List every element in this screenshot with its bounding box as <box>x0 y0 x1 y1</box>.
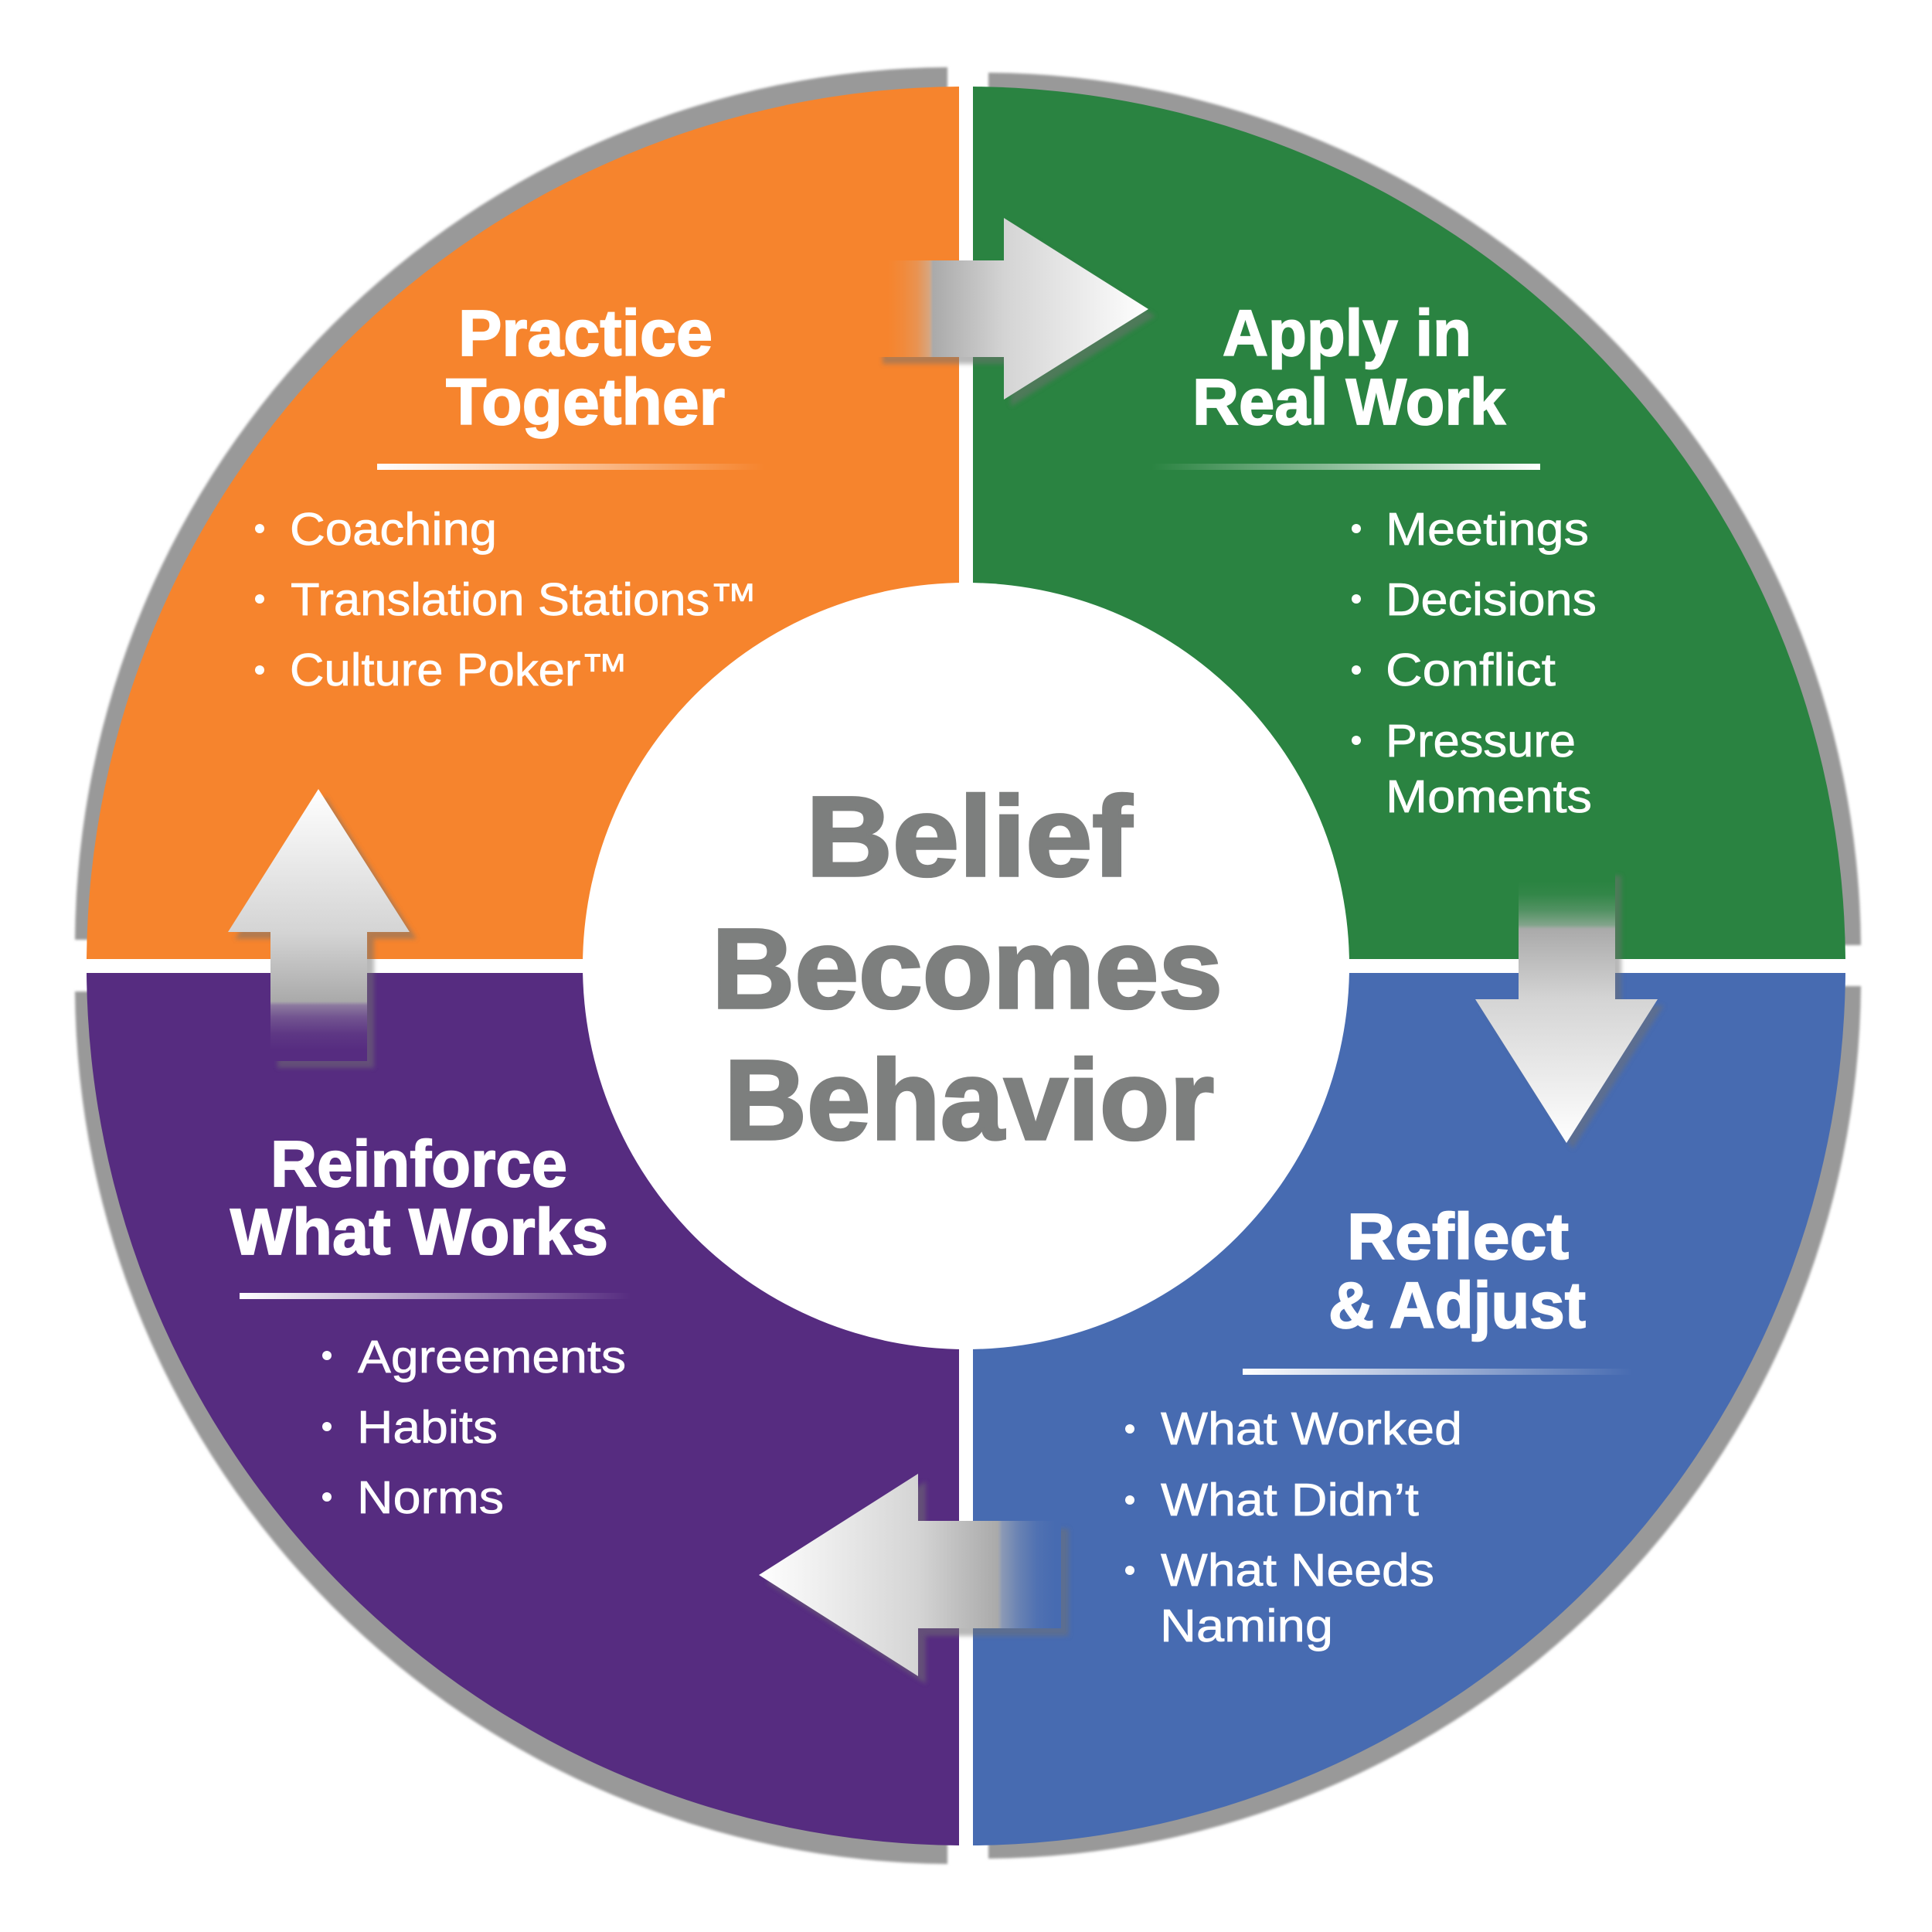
heading: apply in real work: Real Work <box>1192 366 1505 438</box>
list item: decisions: Decisions <box>1386 574 1597 625</box>
panel: reflect and adjust <box>973 973 1861 1859</box>
list item: conflict: Conflict <box>1386 645 1556 696</box>
quadrant: blue <box>973 973 1845 1845</box>
list item: pressure moments: Moments <box>1386 771 1592 822</box>
heading: practice together: Together <box>446 366 725 438</box>
quadrant: purple <box>87 973 959 1845</box>
heading: apply in real work: Apply in <box>1223 297 1471 369</box>
list item: pressure moments: Pressure <box>1386 716 1576 767</box>
list item: habits: Habits <box>357 1402 498 1453</box>
center title: Becomes <box>712 906 1223 1032</box>
heading rule <box>240 1293 631 1299</box>
list item: coaching: Coaching <box>290 504 497 555</box>
list item: what needs naming: Naming <box>1160 1600 1333 1651</box>
heading: apply in real work <box>1192 297 1505 438</box>
panel: reinforce what works <box>75 973 959 1864</box>
quadrant: green <box>973 87 1845 959</box>
panel shadow: purple <box>75 992 947 1864</box>
panel: practice together <box>75 67 959 959</box>
heading: reinforce what works <box>230 1128 608 1268</box>
list item: what didn't: What Didn’t <box>1161 1475 1419 1526</box>
list: reflect items <box>1125 1403 1462 1651</box>
heading: practice together <box>446 297 725 438</box>
center title: Behavior <box>724 1037 1214 1164</box>
arrow: reflect to reinforce <box>759 1474 1069 1684</box>
list item: what needs naming <box>1125 1545 1434 1651</box>
panel: apply in real work <box>973 73 1861 959</box>
list item: translation stations: Translation Stations™ <box>291 574 757 625</box>
heading: reflect and adjust <box>1328 1200 1586 1342</box>
center circle <box>583 583 1349 1349</box>
list item: meetings: Meetings <box>1386 504 1589 555</box>
center title: Belief <box>806 774 1133 900</box>
heading: reinforce what works: What Works <box>230 1196 608 1268</box>
heading: reflect and adjust: Reflect <box>1347 1200 1569 1273</box>
center title <box>712 774 1223 1164</box>
heading: reinforce what works: Reinforce <box>270 1128 567 1200</box>
arrow: practice to apply <box>876 218 1155 406</box>
heading rule <box>377 464 765 470</box>
list item: agreements: Agreements <box>358 1332 626 1383</box>
panel shadow: blue <box>988 986 1861 1859</box>
list: apply items <box>1352 504 1597 822</box>
heading rule <box>1151 464 1540 470</box>
list item: pressure moments <box>1352 716 1592 822</box>
list item: norms: Norms <box>357 1472 504 1523</box>
quadrant: orange <box>87 87 959 959</box>
arrow: reinforce to practice <box>228 789 417 1068</box>
heading: practice together: Practice <box>458 297 713 369</box>
list: practice items <box>255 504 757 696</box>
arrow: apply to reflect <box>1475 869 1664 1149</box>
list item: what needs naming: What Needs <box>1161 1545 1434 1596</box>
list item: what worked: What Worked <box>1161 1403 1462 1454</box>
heading: reflect and adjust: & Adjust <box>1328 1269 1586 1342</box>
heading rule <box>1243 1369 1633 1375</box>
panel shadow: orange <box>75 67 947 940</box>
list item: culture poker: Culture Poker™ <box>290 645 628 696</box>
panel shadow: green <box>988 73 1861 945</box>
list: reinforce items <box>322 1332 626 1523</box>
